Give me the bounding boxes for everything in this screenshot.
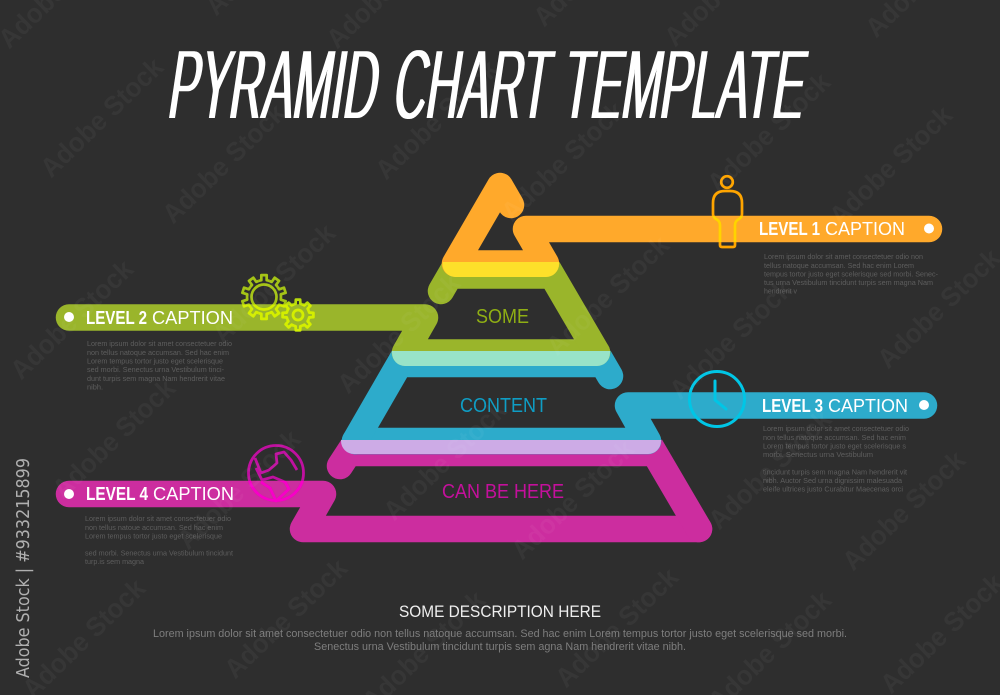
text block: level 2 description: Lorem tempus tortor justo eget scelerisque [87, 356, 223, 366]
text block: level 1 description: tempus tortor justo eget scelerisque sed morbi. Senec- [764, 270, 939, 278]
watermark pattern: Adobe Stock [219, 552, 354, 684]
text block: description body: Lorem ipsum dolor sit amet consectetuer odio non tellus natoque accumsan. Sed hac enim Lorem tempus tortor justo eget scelerisque sed morbi. [153, 628, 847, 640]
watermark pattern: Adobe Stock [332, 267, 467, 399]
level 1 caption: CAPTION [825, 219, 905, 239]
level 2 caption: CAPTION [152, 308, 233, 328]
title: PYRAMID [163, 29, 387, 141]
level 3 blue band with right bar [355, 364, 924, 441]
icon: globe [248, 446, 304, 501]
text block: level 1 description: tellus natoque accumsan. Sed hac enim Lorem [764, 261, 914, 270]
level 1 orange apex with right bar [455, 186, 929, 264]
text block: level 1 description [764, 252, 939, 296]
text block: level 2 description: sed morbi. Senectus urna Vestibulum tinci- [87, 365, 225, 374]
overlap: aqua band [392, 351, 610, 366]
watermark pattern: Adobe Stock [541, 229, 676, 361]
level 4 caption: LEVEL 4 [86, 484, 149, 504]
watermark pattern: Adobe Stock [172, 423, 307, 555]
text block: level 1 description: Lorem ipsum dolor sit amet consectetuer odio non [764, 252, 923, 261]
watermark pattern: Adobe Stock [702, 66, 837, 198]
watermark pattern: Adobe Stock [370, 53, 505, 185]
text block: level 3 description: non tellus natoque accumsan. Sed hac enim [763, 433, 906, 442]
text block: level 3 description: tincidunt turpis sem magna Nam hendrerit vit [763, 468, 907, 476]
text block: level 3 description: morbi. Senectus urna Vestibulum [763, 450, 873, 459]
text block: level 2 description [87, 339, 232, 392]
icon: clock [690, 372, 744, 426]
text block: level 2 description: non tellus natoque accumsan. Sed hac enim [87, 348, 229, 357]
watermark pattern: Adobe Stock [47, 372, 182, 504]
watermark pattern: Adobe Stock [5, 253, 140, 385]
overlap: lilac band [341, 440, 661, 454]
level 2 caption: LEVEL 2 [86, 308, 147, 328]
text block: level 4 description: Lorem ipsum dolor sit amet consectetuer odio [85, 514, 231, 523]
panel: pyramid chart [69, 186, 929, 529]
text block: level 4 description: turp.is sem magna [85, 557, 145, 566]
overlap: yellow band [442, 262, 559, 277]
text block: level 1 description: hendrerit v [764, 286, 797, 296]
level 4 caption: CAPTION [153, 484, 234, 504]
level 3 caption: LEVEL 3 [762, 396, 823, 416]
watermark pattern: Adobe Stock [157, 97, 292, 229]
heading: description: SOME DESCRIPTION HERE [399, 603, 601, 621]
icon: person [713, 176, 742, 247]
watermark pattern: Adobe Stock [378, 394, 513, 526]
text block: level 1 description: tus urna Vestibulum tincidunt turpis sem magna Nam [764, 278, 933, 287]
watermark pattern: Adobe Stock [664, 273, 799, 405]
watermark pattern: Adobe Stock [506, 433, 641, 565]
text block: level 3 description: eleife ultrices justo Curabitur Maecenas orci [763, 484, 903, 494]
watermark pattern: Adobe Stock [207, 217, 342, 349]
watermark pattern: Adobe Stock [703, 403, 838, 535]
text block: description body [153, 628, 847, 653]
level 3 caption [762, 396, 929, 416]
text block: level 4 description: non tellus natoue accumsan. Sed hac enim [85, 523, 223, 532]
title: CHART [388, 29, 559, 141]
stock id vertical text: Adobe Stock | #933215899 [13, 458, 34, 678]
text block: level 4 description [85, 514, 233, 566]
text block: level 2 description: dunt turpis sem magna Nam hendrerit vitae [87, 374, 225, 383]
level 4 pink band with left bar [69, 453, 699, 529]
watermark pattern: Adobe Stock [550, 561, 685, 693]
pyramid label: CAN BE HERE: CAN BE HERE [442, 481, 564, 503]
text block: level 3 description: Lorem tempus tortor justo eget scelerisque s [763, 442, 906, 450]
level 2 caption [64, 308, 233, 328]
pyramid label: SOME: SOME [476, 306, 529, 328]
text block: level 4 description: Lorem tempus tortor justo eget scelerisque [85, 532, 222, 540]
watermark pattern: Adobe Stock [837, 444, 972, 576]
text block: level 3 description [763, 424, 909, 494]
text block: level 3 description: Lorem ipsum dolor sit amet consectetuer odio [763, 424, 909, 433]
watermark pattern: Adobe Stock [35, 51, 170, 183]
text block: level 3 description: nibh. Auctor Sed urna dignissim malesuada [763, 476, 903, 485]
icon: gears [242, 275, 313, 330]
level 1 caption: LEVEL 1 [759, 219, 820, 239]
pyramid label: CONTENT: CONTENT [460, 395, 547, 417]
text block: level 2 description: nibh. [87, 382, 103, 392]
text block: description body: Senectus urna Vestibulum tincidunt turpis sem agna Nam hendrerit vitae nibh. [314, 641, 686, 653]
level 3 caption: CAPTION [828, 396, 908, 416]
text block: level 4 description: sed morbi. Senectus urna Vestibulum tincidunt [85, 548, 233, 558]
level 1 caption [759, 219, 934, 239]
level 4 caption [64, 484, 234, 504]
watermark pattern: Adobe Stock [496, 95, 631, 227]
watermark pattern: Adobe Stock [824, 99, 959, 231]
text block: level 2 description: Lorem ipsum dolor sit amet consectetuer odio [87, 339, 232, 348]
level 2 green band with left bar [69, 276, 597, 352]
